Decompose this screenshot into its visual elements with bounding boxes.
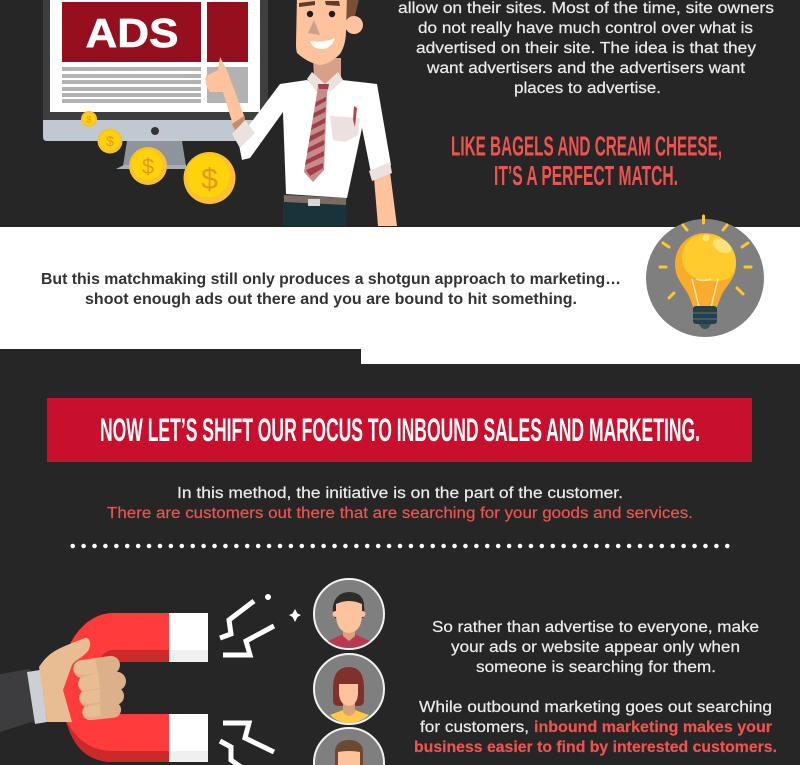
icon: computer monitor with ads (43, 0, 268, 169)
text block: method intro (107, 485, 693, 522)
text block: outbound versus inbound: While outbound marketing goes out searching (419, 699, 772, 716)
text block: advertise only when searched: someone is searching for them. (476, 659, 716, 676)
text block: method intro: There are customers out there that are searching for your goods and services. (107, 505, 693, 522)
icon: gold coins (81, 111, 236, 204)
icon: customer avatar man (314, 579, 384, 649)
icon: gold coins: $ (142, 154, 154, 179)
text block: shotgun approach: shoot enough ads out there and you are bound to hit something. (85, 291, 577, 308)
text block: shotgun approach (41, 271, 621, 308)
illustration: businessman giving thumbs up (206, 0, 397, 226)
text block: site owners explanation: advertised on their site. The idea is that they (416, 40, 756, 57)
text block: site owners explanation: allow on their sites. Most of the time, site owners (398, 0, 774, 17)
banner: inbound heading (47, 398, 752, 462)
icon: gold coins: $ (201, 163, 218, 196)
text block: site owners explanation (398, 0, 774, 97)
icon: computer monitor with ads: ADS (86, 10, 178, 56)
text block: advertise only when searched: So rather than advertise to everyone, make (432, 619, 759, 636)
icon: magnetic sparks (220, 594, 301, 765)
icon: gold coins: $ (86, 114, 92, 124)
callout: perfect match headline (451, 130, 722, 191)
text block: outbound versus inbound: for customers, (420, 719, 529, 736)
panel: white band (0, 227, 800, 364)
text block: shotgun approach: But this matchmaking still only produces a shotgun approach to marketing… (41, 271, 621, 288)
icon: magnet held by hand (0, 613, 208, 762)
icon: customer avatar woman (314, 654, 384, 724)
text block: site owners explanation: want advertisers and the advertisers want (426, 60, 746, 77)
text block: outbound versus inbound (414, 699, 777, 756)
text block: outbound versus inbound: inbound marketing makes your (534, 719, 772, 736)
text block: site owners explanation: places to advertise. (514, 80, 661, 97)
text block: advertise only when searched (432, 619, 759, 676)
text block: site owners explanation: do not really have much control over what is (418, 20, 753, 37)
icon: gold coins: $ (106, 133, 114, 149)
icon: light bulb (646, 216, 764, 337)
icon: customer avatar man with beard (314, 728, 384, 765)
text block: outbound versus inbound: business easier to find by interested customers. (414, 739, 777, 756)
text block: advertise only when searched: your ads or website appear only when (451, 639, 740, 656)
text block: method intro: In this method, the initiative is on the part of the customer. (177, 485, 623, 502)
